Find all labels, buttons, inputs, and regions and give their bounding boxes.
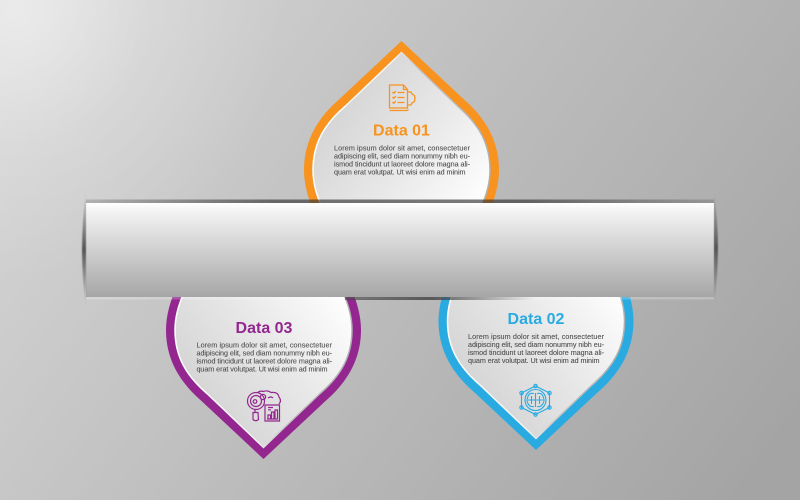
text block: Data 01 body: ismod tincidunt ut laoreet dolore magna ali- (334, 160, 471, 168)
text block: Data 02 body: Lorem ipsum dolor sit amet, consectetuer (468, 332, 605, 341)
text block: Data 03 body: Lorem ipsum dolor sit amet, consectetuer (196, 340, 333, 350)
panel: Data 02 drop (438, 285, 634, 450)
text block: Data 01 body: adipiscing elit, sed diam nonummy nibh eu- (334, 152, 471, 160)
text block: Data 02 body (468, 332, 605, 365)
icon: checklist with gear (390, 85, 415, 110)
panel: Data 01 drop (304, 41, 499, 206)
text block: Data 03 body: ismod tincidunt ut laoreet dolore magna ali- (196, 356, 333, 366)
top shadow of bar (86, 200, 714, 203)
title: Data 03: Data 03 (236, 320, 293, 337)
bottom shadow of bar (86, 297, 714, 300)
text block: Data 03 body: adipiscing elit, sed diam nonummy nibh eu- (196, 348, 333, 358)
text block: Data 02 body: quam erat volutpat. Ut wisi enim ad minim (468, 356, 600, 365)
right end cap (714, 192, 718, 304)
text block: Data 02 body: adipiscing elit, sed diam nonummy nibh eu- (468, 340, 605, 349)
text block: Data 01 body: Lorem ipsum dolor sit amet, consectetuer (334, 144, 471, 152)
text block: Data 01 body (334, 144, 471, 176)
panel: Data 03 drop (166, 294, 361, 459)
title: Data 02: Data 02 (508, 311, 565, 328)
text block: Data 03 body (196, 340, 333, 374)
left end cap (82, 192, 86, 307)
title: Data 01: Data 01 (373, 122, 430, 140)
bar body (86, 203, 714, 297)
text block: Data 01 body: quam erat volutpat. Ut wisi enim ad minim (334, 168, 466, 176)
icon: magnifier with cloud and chart (248, 391, 280, 421)
text block: Data 03 body: quam erat volutpat. Ut wisi enim ad minim (196, 364, 328, 374)
icon: brain in hexagon network (520, 384, 551, 416)
text block: Data 02 body: ismod tincidunt ut laoreet dolore magna ali- (468, 348, 605, 357)
panel: central bar (82, 192, 718, 307)
